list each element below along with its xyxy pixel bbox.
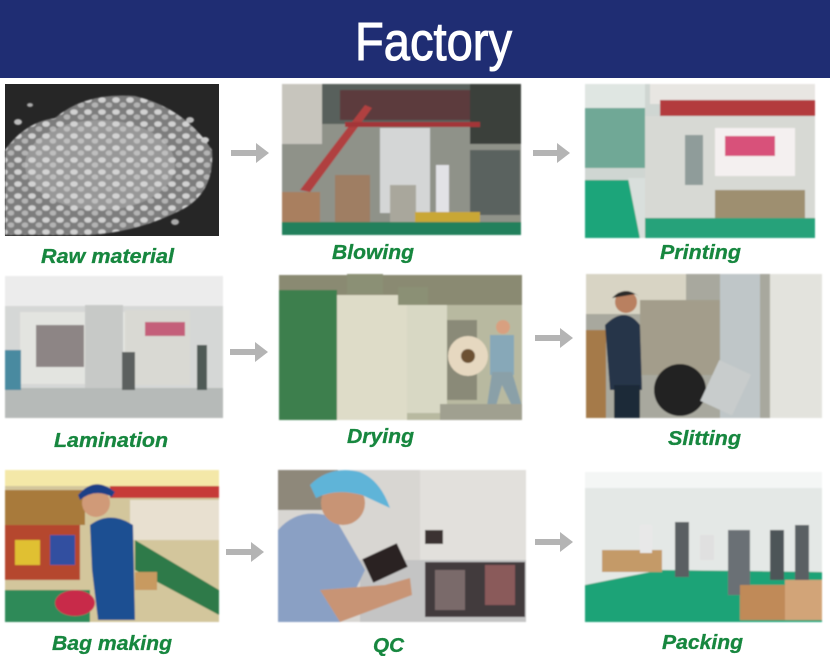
panel: drying bbox=[279, 274, 522, 448]
panel: QC bbox=[278, 470, 526, 656]
arrow 1 bbox=[231, 143, 269, 163]
label: Raw material bbox=[41, 246, 174, 268]
panel: blowing bbox=[282, 84, 521, 264]
panel: slitting bbox=[586, 274, 822, 450]
label: Bag making bbox=[52, 633, 172, 655]
label: Drying bbox=[347, 426, 414, 448]
label: Blowing bbox=[332, 242, 414, 264]
label: Lamination bbox=[54, 430, 168, 452]
label: Packing bbox=[662, 632, 743, 654]
title: Factory bbox=[355, 12, 512, 72]
panel: printing bbox=[585, 84, 815, 264]
arrow 7 bbox=[226, 542, 264, 562]
arrow 5 bbox=[535, 328, 573, 348]
panel: raw material bbox=[5, 84, 219, 268]
panel: lamination bbox=[5, 276, 223, 452]
title banner bbox=[0, 0, 830, 78]
label: Printing bbox=[660, 242, 741, 264]
panel: packing bbox=[585, 472, 822, 654]
label: Slitting bbox=[668, 428, 741, 450]
panel: bag making bbox=[5, 470, 219, 655]
arrow 8 bbox=[535, 532, 573, 552]
arrow 2 bbox=[533, 143, 570, 163]
arrow 4 bbox=[230, 342, 268, 362]
